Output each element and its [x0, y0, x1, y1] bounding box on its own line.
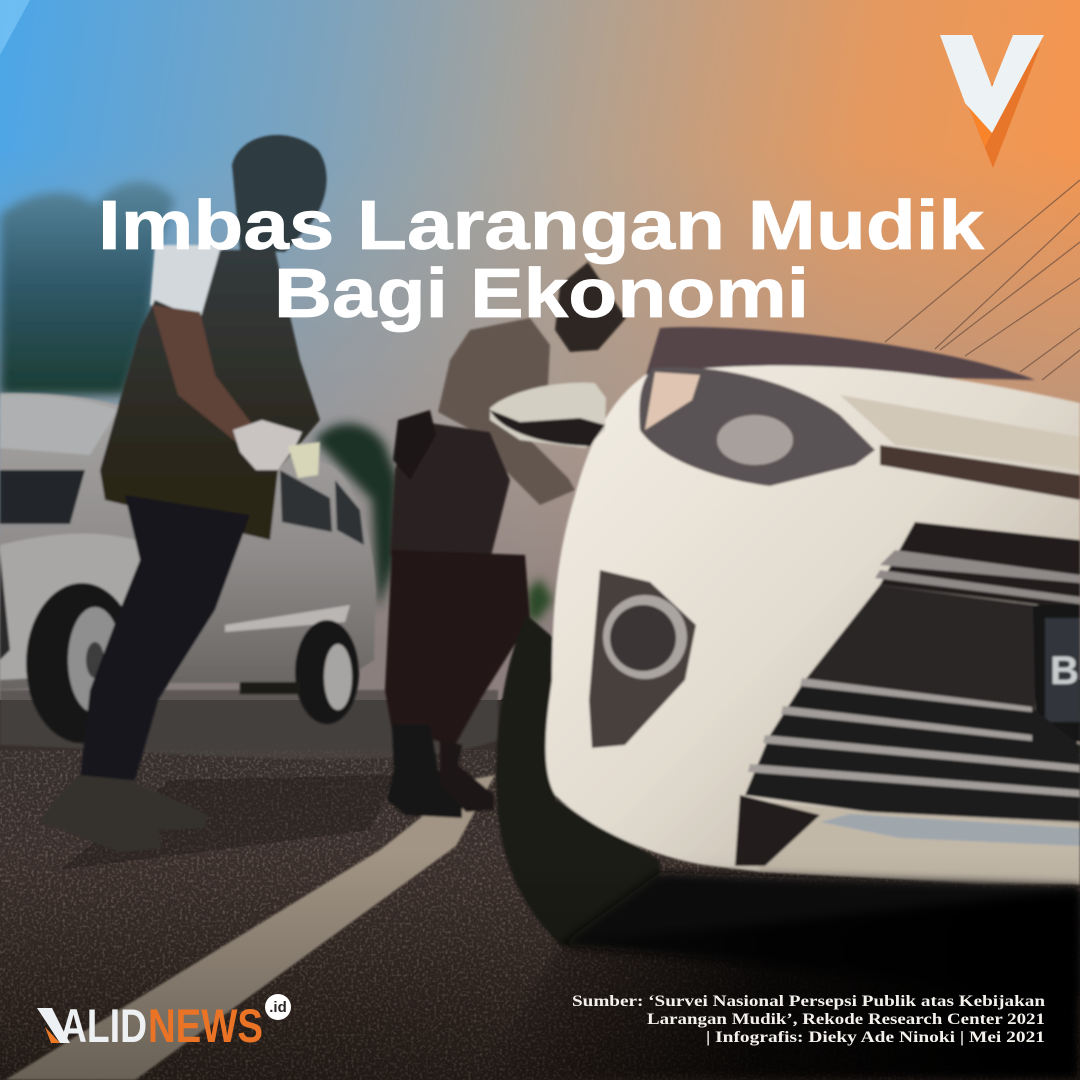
bottom shading [0, 850, 1080, 1080]
torso [438, 318, 575, 505]
source credit: Larangan Mudik’, Rekode Research Center 2021 [647, 1011, 1045, 1028]
source credit: | Infografis: Dieky Ade Ninoki | Mei 2021 [706, 1029, 1045, 1046]
white shirt sleeve [150, 245, 222, 320]
photo background: sky [0, 0, 1080, 700]
logo: V mark top right [940, 35, 1044, 168]
license plate [1045, 618, 1080, 722]
title: Bagi Ekonomi [274, 254, 809, 332]
mirror [490, 382, 606, 448]
legs [80, 495, 250, 780]
vest bottom and belt [390, 420, 510, 560]
glove and thermometer [233, 420, 302, 470]
vest [100, 250, 320, 540]
title: Imbas Larangan Mudik [98, 186, 984, 264]
.id badge: .id [269, 999, 287, 1016]
shadow under car [560, 872, 1080, 1000]
white car: front [490, 327, 1080, 945]
hood and body [546, 366, 1080, 885]
road [0, 680, 1080, 1080]
title [98, 186, 984, 332]
arm [152, 305, 258, 445]
source credit: Sumber: ‘Survei Nasional Persepsi Publik atas Kebijakan [572, 993, 1045, 1010]
dark trim stripe [880, 445, 1080, 500]
hood crease shading [840, 395, 1080, 470]
plate holder [1033, 605, 1080, 742]
lower grille [745, 680, 1080, 822]
source credit [572, 993, 1045, 1046]
lane stripe [5, 775, 495, 1080]
.id badge [265, 994, 291, 1020]
grille bars [748, 678, 1080, 797]
trees [0, 181, 553, 622]
logo: Validnews.id [37, 994, 291, 1052]
cap and mask [555, 262, 626, 352]
legs [385, 550, 530, 745]
silver car [0, 393, 376, 743]
tire [496, 615, 660, 945]
foglight housing [589, 570, 696, 748]
head [232, 135, 327, 252]
logo: Validnews.id: NEWS [148, 999, 263, 1052]
lower bumper trim [745, 800, 1080, 885]
windshield [645, 327, 1035, 380]
grille middle panel [805, 585, 1035, 715]
logo: Validnews.id: ALID [60, 999, 147, 1052]
white car: front: B [1050, 649, 1079, 693]
shoes [40, 775, 208, 852]
grille upper [880, 522, 1080, 610]
person right: police officer [385, 262, 626, 818]
headlight [639, 367, 875, 486]
power lines [885, 180, 1080, 380]
person left: inspector [40, 135, 327, 852]
boots [387, 725, 462, 818]
